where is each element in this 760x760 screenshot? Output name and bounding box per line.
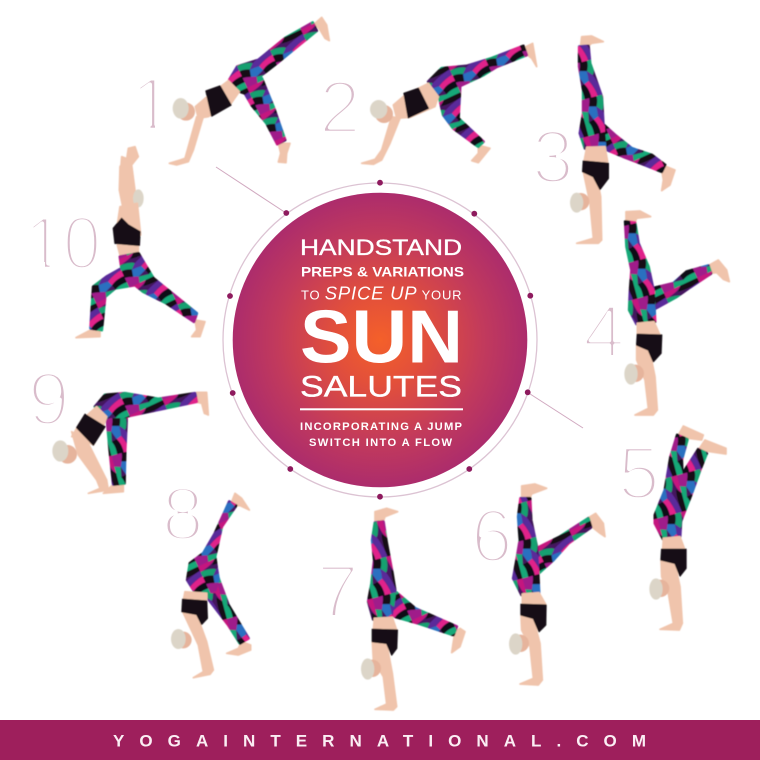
title text <box>300 235 464 449</box>
outer ring <box>223 183 537 497</box>
gradient sun disc <box>233 193 527 487</box>
blond hair <box>624 363 638 385</box>
footer band <box>0 720 760 760</box>
connector line to step 5 <box>527 392 583 428</box>
black crop top <box>77 414 105 445</box>
title text: SUN <box>300 294 463 378</box>
leggings <box>91 253 197 330</box>
blond hair <box>649 578 663 600</box>
step numbers: 7 <box>317 549 359 633</box>
leggings <box>625 222 711 324</box>
title text: SWITCH INTO A FLOW <box>309 437 452 449</box>
step numbers: 5 <box>618 431 660 515</box>
title text: PREPS & VARIATIONS <box>301 264 464 280</box>
leggings <box>229 23 317 144</box>
step numbers: 10 <box>25 201 101 285</box>
blond hair <box>370 100 387 119</box>
footer website text: YOGAINTERNATIONAL.COM <box>113 732 646 750</box>
figure: step 5 pose <box>649 426 726 630</box>
figure: step 7 pose <box>361 508 465 710</box>
black crop top <box>182 599 207 624</box>
black crop top <box>637 334 662 362</box>
leggings <box>579 46 665 172</box>
black crop top <box>206 86 231 116</box>
figure: step 10 pose <box>76 147 205 338</box>
ring dots <box>227 180 533 500</box>
blond hair <box>171 629 186 649</box>
step numbers: 4 <box>583 289 625 373</box>
figure: step 1 pose <box>169 17 329 165</box>
step numbers: 6 <box>471 494 513 578</box>
step numbers: 2 <box>319 65 361 149</box>
step numbers <box>25 62 660 633</box>
black crop top <box>113 218 140 245</box>
blond hair <box>173 98 189 119</box>
connector line to step 1 <box>216 167 286 213</box>
figure: step 2 pose <box>362 43 537 164</box>
blond hair <box>509 633 522 655</box>
title text: HANDSTAND <box>300 235 462 260</box>
step numbers: 3 <box>532 115 574 199</box>
title text: INCORPORATING A JUMP <box>300 421 463 433</box>
black crop top <box>372 629 397 655</box>
leggings <box>95 393 197 484</box>
step numbers: 1 <box>131 62 173 146</box>
leggings <box>513 498 591 595</box>
figure: step 6 pose <box>509 484 605 685</box>
figure: step 3 pose <box>570 36 675 243</box>
step numbers: 9 <box>28 357 70 441</box>
title text: TO SPICE UP YOUR <box>301 282 462 303</box>
black crop top <box>521 604 546 632</box>
black crop top <box>661 549 686 576</box>
figure: step 8 pose <box>171 493 251 678</box>
figure: step 9 pose <box>52 392 208 493</box>
leggings <box>368 522 457 635</box>
blond hair <box>52 440 68 462</box>
leggings <box>187 502 248 643</box>
black crop top <box>583 161 608 189</box>
black crop top <box>404 88 428 118</box>
blond hair <box>570 193 583 213</box>
figure: step 4 pose <box>624 211 729 415</box>
leggings <box>428 46 527 147</box>
blond hair <box>133 189 144 207</box>
blond hair <box>361 658 374 680</box>
central circle graphic <box>223 180 537 500</box>
title text: SALUTES <box>300 371 462 404</box>
step numbers: 8 <box>162 472 204 556</box>
leggings <box>655 435 707 539</box>
